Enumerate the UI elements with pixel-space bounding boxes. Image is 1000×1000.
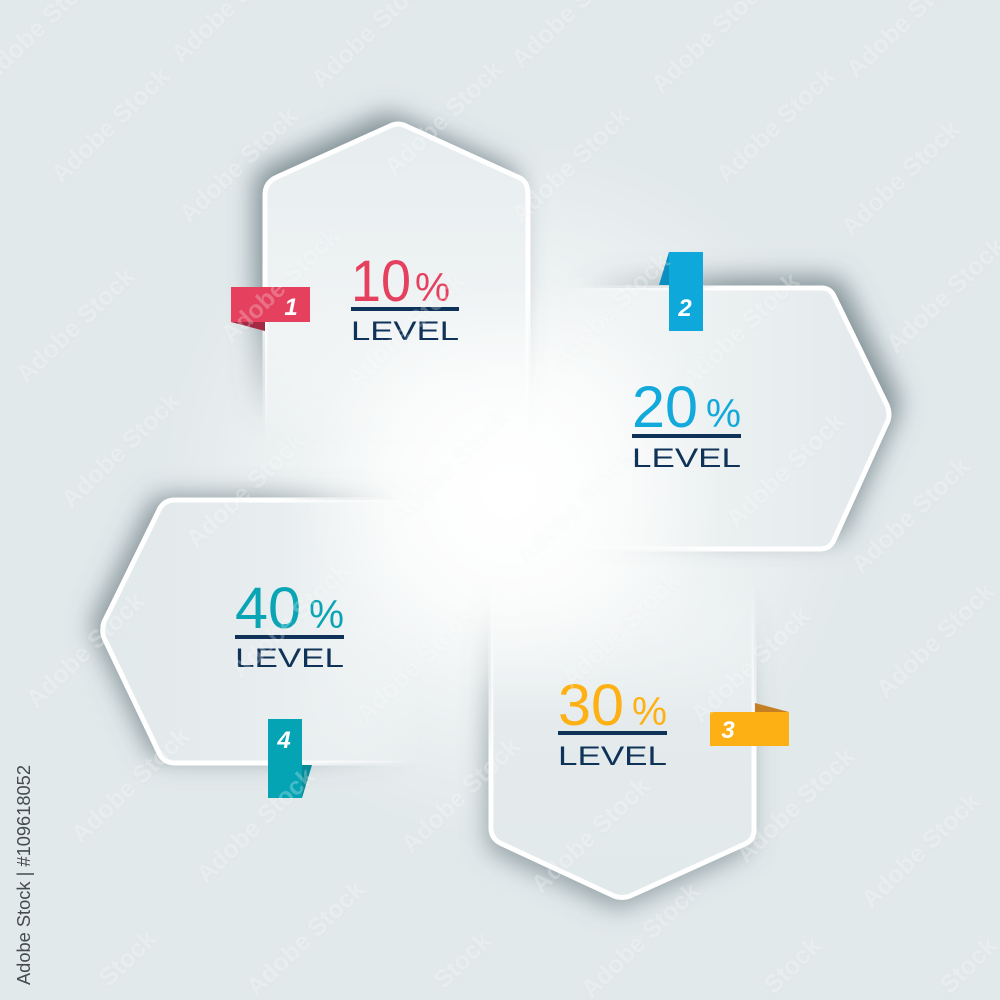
text block: 10% level: 10 xyxy=(351,249,411,314)
watermarks: Adobe Stock xyxy=(836,115,965,242)
watermarks: Adobe Stock xyxy=(721,407,850,534)
watermarks: Adobe Stock xyxy=(11,262,140,389)
panel: level 4 arrow xyxy=(93,496,420,763)
watermarks: Adobe Stock xyxy=(856,787,985,914)
tab 3 xyxy=(710,703,789,746)
text block: 30% level: % xyxy=(632,690,667,734)
watermarks: Adobe Stock xyxy=(711,62,840,189)
text block: 10% level xyxy=(351,249,459,346)
watermarks: Adobe Stock xyxy=(379,55,508,182)
tab 2: 2 xyxy=(677,295,692,322)
text block: 40% level: LEVEL xyxy=(235,643,344,673)
watermarks: Adobe Stock xyxy=(191,762,320,889)
watermarks: Adobe Stock xyxy=(341,267,470,394)
watermarks: Adobe Stock xyxy=(676,267,805,394)
watermarks: Adobe Stock xyxy=(846,452,975,579)
watermarks: Adobe Stock xyxy=(46,62,175,189)
watermarks: Adobe Stock xyxy=(511,442,640,569)
watermarks: Adobe Stock xyxy=(871,577,1000,704)
watermarks: Adobe Stock xyxy=(396,732,525,859)
watermarks: Stock xyxy=(93,925,162,992)
text block: 20% level: LEVEL xyxy=(632,443,741,473)
watermarks: Adobe Stock xyxy=(386,402,515,529)
watermarks: Adobe Stock xyxy=(21,587,150,714)
watermarks: Adobe Stock xyxy=(174,102,303,229)
watermarks: Adobe Stock xyxy=(556,567,685,694)
tab 4: 4 xyxy=(276,727,291,754)
text block: 40% level: 40 xyxy=(235,576,301,641)
watermarks: Adobe Stock xyxy=(351,602,480,729)
watermarks: Stock xyxy=(428,927,497,994)
watermarks: Adobe Stock xyxy=(526,772,655,899)
tab 1: 1 xyxy=(284,294,298,321)
tab 4 xyxy=(268,719,312,798)
watermarks: Adobe Stock xyxy=(56,387,185,514)
tab 1 xyxy=(231,287,310,331)
text block: 10% level: % xyxy=(415,266,450,310)
watermarks: Adobe Stock xyxy=(686,602,815,729)
text block: 10% level: LEVEL xyxy=(351,316,459,346)
watermarks: Adobe Stock xyxy=(241,875,370,1000)
watermarks: Adobe Stock xyxy=(66,722,195,849)
text block: 30% level xyxy=(558,673,667,771)
text block: 40% level xyxy=(235,576,344,673)
text block: 30% level: 30 xyxy=(558,673,624,738)
text block: 30% level: LEVEL xyxy=(558,741,667,771)
watermarks: Stock xyxy=(758,932,827,999)
text block: 20% level: % xyxy=(706,392,741,436)
text block: 20% level: 20 xyxy=(632,375,698,440)
watermarks: Adobe Stock xyxy=(731,742,860,869)
panel: level 1 arrow xyxy=(255,114,528,440)
text block: 20% level xyxy=(632,375,741,473)
text block: 40% level: % xyxy=(309,593,344,637)
center glow xyxy=(300,280,720,700)
tab 2 xyxy=(659,252,703,331)
stock id label: Adobe Stock | #109618052 xyxy=(14,765,34,985)
watermarks: Adobe Stock xyxy=(216,222,345,349)
watermarks: Adobe Stock xyxy=(226,557,355,684)
watermarks: Adobe Stock xyxy=(576,877,705,1000)
panel: level 3 arrow xyxy=(487,580,754,908)
watermarks: Adobe Stock xyxy=(181,427,310,554)
tab 3: 3 xyxy=(721,717,735,744)
watermarks: Adobe Stock xyxy=(506,102,635,229)
panel: level 2 arrow xyxy=(560,278,899,549)
watermarks: Adobe Stock xyxy=(546,247,675,374)
